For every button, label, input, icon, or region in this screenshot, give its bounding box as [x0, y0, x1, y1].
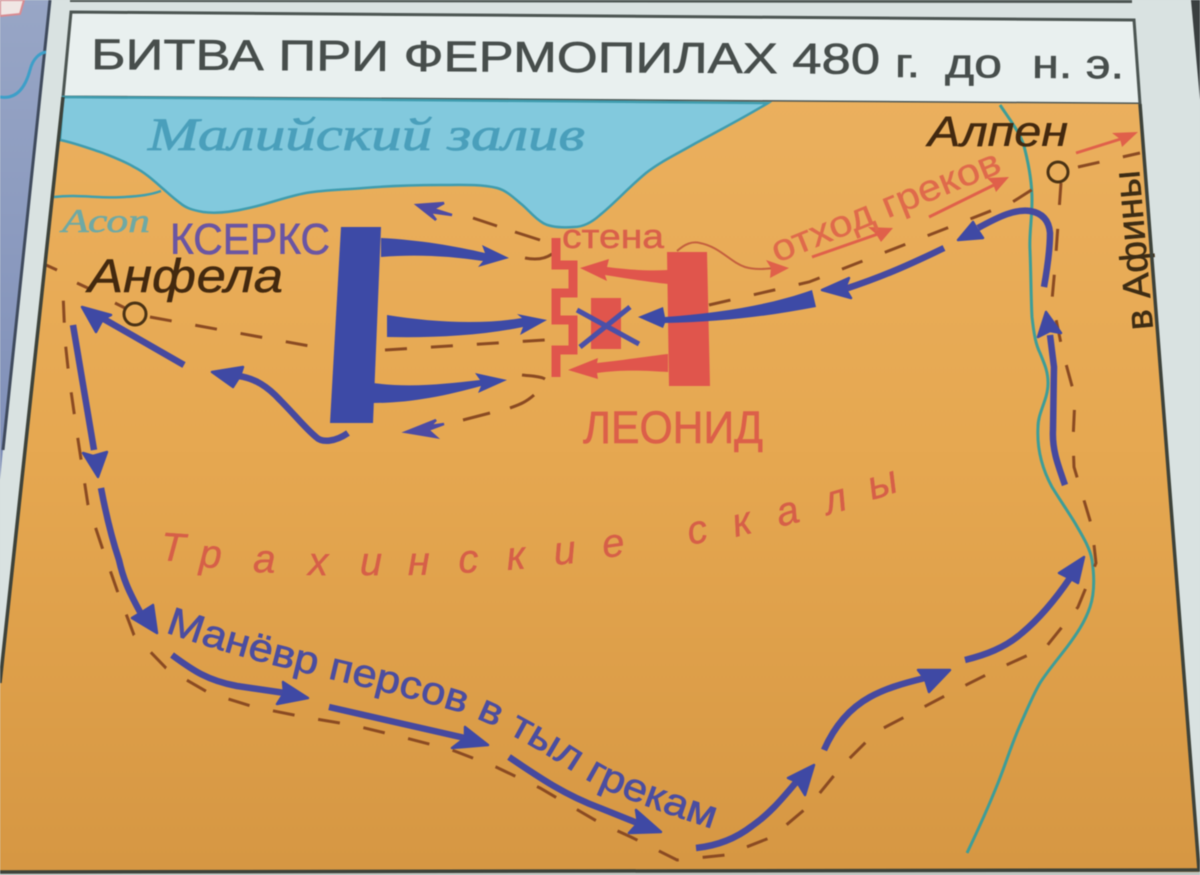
Persian thick flank attack	[638, 290, 816, 328]
place: Alpen	[925, 108, 1068, 182]
Greek retreat arrows	[677, 132, 1138, 278]
heading	[91, 31, 1124, 87]
Persian dashed withdrawal arrows	[406, 203, 452, 437]
heading: н. э.	[1032, 41, 1124, 87]
retreat label: отход греков	[765, 141, 1006, 270]
manoeuvre label: Манёвр персов в тыл грекам	[167, 606, 717, 829]
route dashes	[46, 153, 1140, 860]
east river	[967, 105, 1094, 853]
heading: до	[945, 40, 1002, 87]
wall	[556, 218, 664, 377]
heading: г.	[895, 40, 920, 86]
gulf water	[60, 97, 768, 227]
defeat cross	[577, 307, 639, 347]
label: Leonidas: ЛЕОНИД	[583, 402, 763, 453]
river Asop label: Асоп	[59, 203, 150, 240]
mountains label: Трахинские скалы	[159, 458, 903, 584]
label: Xerxes: КСЕРКС	[170, 215, 330, 264]
place: Alpen: Алпен	[925, 108, 1068, 156]
heading: БИТВА ПРИ ФЕРМОПИЛАХ 480	[91, 31, 880, 84]
title panel	[63, 12, 1140, 104]
river Asop	[54, 191, 161, 197]
place: Anfela: Анфела	[85, 249, 283, 302]
place: Anfela	[85, 249, 283, 325]
wall label: стена	[562, 218, 664, 256]
Greek army formation	[568, 252, 710, 386]
gulf label: Малийский залив	[147, 109, 585, 161]
Persian route arrows	[73, 211, 1084, 848]
Persian army formation	[330, 227, 547, 423]
direction label: to Athens: в Афины	[1106, 169, 1162, 332]
